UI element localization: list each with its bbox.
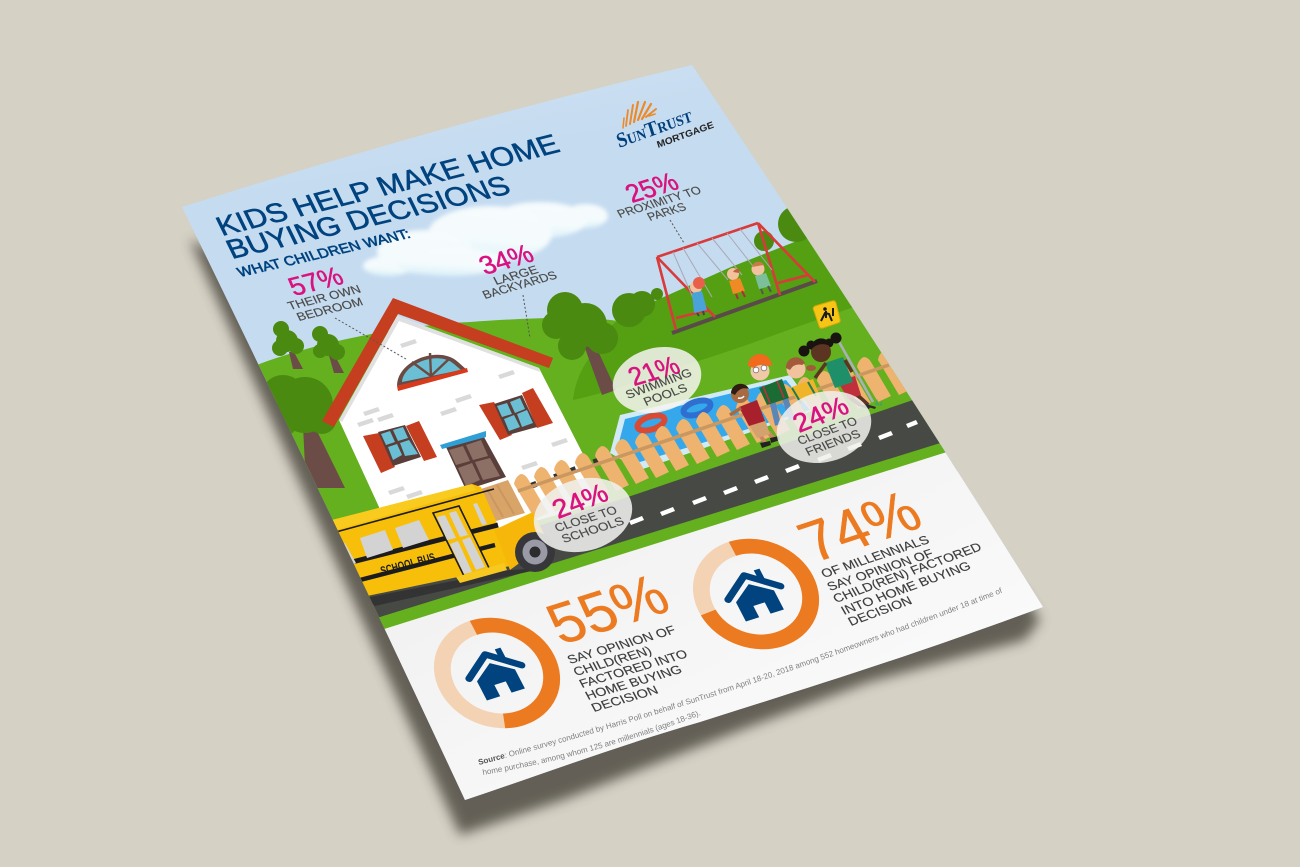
picket fence <box>478 350 912 521</box>
callout bubble: close to friends: FRIENDS <box>803 427 863 459</box>
callout bubble: close to friends: CLOSE TO <box>795 414 860 448</box>
stat: 55 percent: SAY OPINION OF <box>565 623 678 667</box>
stat: proximity to parks: PARKS <box>645 200 689 224</box>
roof <box>322 298 553 427</box>
left window <box>363 421 437 473</box>
page drop shadow <box>190 240 1040 835</box>
pool <box>610 375 815 470</box>
poster page <box>182 65 1043 800</box>
callout bubble: close to schools: 24% <box>547 478 613 524</box>
bus label: SCHOOL BUS <box>379 550 437 578</box>
stat: large backyards: LARGE <box>491 263 541 288</box>
stat: 55 percent: 55% <box>536 562 680 656</box>
callout bubble: close to friends <box>769 381 879 473</box>
stat: own bedroom: 57% <box>283 262 348 301</box>
callout bubble: close to friends: 24% <box>788 391 854 438</box>
stat: large backyards: BACKYARDS <box>480 268 559 302</box>
stat: own bedroom <box>283 262 365 324</box>
children group <box>730 332 876 448</box>
stat: 55 percent: CHILD(REN) <box>571 644 654 679</box>
stat: 55 percent <box>536 562 690 715</box>
pool ring red <box>636 412 666 434</box>
stat: proximity to parks: PROXIMITY TO <box>615 183 704 221</box>
stat: 55 percent: DECISION <box>589 683 661 715</box>
stat: 74 percent: CHILD(REN) FACTORED <box>831 540 984 606</box>
pool ring blue <box>682 397 712 419</box>
bus body <box>332 484 510 596</box>
subtitle: WHAT CHILDREN WANT: <box>234 226 413 280</box>
source note: home purchase, among whom 125 are millennials (ages 18-36). <box>482 711 700 775</box>
small tree right <box>312 326 345 373</box>
title: KIDS HELP MAKE HOME <box>211 129 564 241</box>
bricks <box>357 339 568 499</box>
callout bubble: swimming pools <box>605 337 709 423</box>
big tree left <box>261 375 345 488</box>
callout bubble: swimming pools: 21% <box>623 351 685 391</box>
cloud <box>363 202 608 276</box>
lawn <box>240 300 960 650</box>
bottom white panel <box>378 451 1060 820</box>
bus wheel <box>515 532 555 572</box>
bus stripes <box>336 489 498 580</box>
swing set <box>657 223 817 333</box>
stat: own bedroom: BEDROOM <box>294 295 365 324</box>
bus hood <box>499 512 544 570</box>
house <box>322 298 610 528</box>
child 1 <box>730 384 780 448</box>
school bus <box>332 484 555 606</box>
stat: 74 percent: OF MILLENNIALS <box>819 533 932 581</box>
road lane dashes <box>629 420 918 525</box>
stat: 74 percent: 74% <box>787 479 932 574</box>
distant hill <box>573 232 860 400</box>
callout bubble: swimming pools: SWIMMING <box>623 366 694 402</box>
donut chart: 55 percent <box>424 612 570 734</box>
icon: house <box>460 644 532 702</box>
stat: large backyards: 34% <box>474 239 539 280</box>
big tree middle <box>542 292 618 395</box>
bus windows <box>338 503 487 567</box>
callout bubble: close to schools <box>525 467 641 563</box>
stat: own bedroom: THEIR OWN <box>285 282 363 313</box>
callout bubble: close to schools: CLOSE TO <box>552 503 619 535</box>
sky background <box>170 50 1060 820</box>
road <box>340 400 950 618</box>
bus door <box>433 506 490 576</box>
stat: 74 percent: SAY OPINION OF <box>825 547 936 594</box>
wall <box>339 316 610 528</box>
child 4 <box>798 332 876 409</box>
garden gate <box>478 480 525 521</box>
road strip green <box>377 443 950 632</box>
swing kid 2 <box>727 268 745 299</box>
donut chart: 74 percent <box>683 533 829 655</box>
stat: 74 percent <box>787 479 984 629</box>
source note: Source: Online survey conducted by Harris Poll on behalf of SunTrust from April 18-20, 2018 among 552 homeowners who had children under 18 at time of <box>478 587 1002 764</box>
child 3 <box>786 357 820 403</box>
dashed leader lines <box>335 220 684 359</box>
stat: 55 percent: FACTORED INTO <box>577 647 690 691</box>
stat: 74 percent: INTO HOME BUYING <box>839 559 973 618</box>
small tree left <box>272 321 304 369</box>
stat: proximity to parks: 25% <box>620 167 684 208</box>
stat: 55 percent: HOME BUYING <box>583 663 684 703</box>
stat: large backyards <box>474 239 559 302</box>
callout bubble: swimming pools: POOLS <box>641 381 690 409</box>
stat: proximity to parks <box>615 167 704 224</box>
sign post <box>813 301 882 406</box>
logo <box>613 102 715 153</box>
attic half-moon window <box>397 353 468 391</box>
stat: 74 percent: DECISION <box>846 594 915 629</box>
door <box>440 431 506 490</box>
icon: house <box>719 565 792 623</box>
swing kid 3 <box>752 262 771 294</box>
child 2 <box>748 354 792 425</box>
logo sunburst <box>623 102 656 128</box>
logo wordmark: SUNTRUST <box>613 103 695 153</box>
right window <box>479 388 553 440</box>
callout bubble: close to schools: SCHOOLS <box>559 514 626 546</box>
swing kid 1 <box>690 277 707 316</box>
trees and bushes <box>612 206 814 327</box>
logo mortgage: MORTGAGE <box>656 120 715 151</box>
title: BUYING DECISIONS <box>221 170 515 264</box>
